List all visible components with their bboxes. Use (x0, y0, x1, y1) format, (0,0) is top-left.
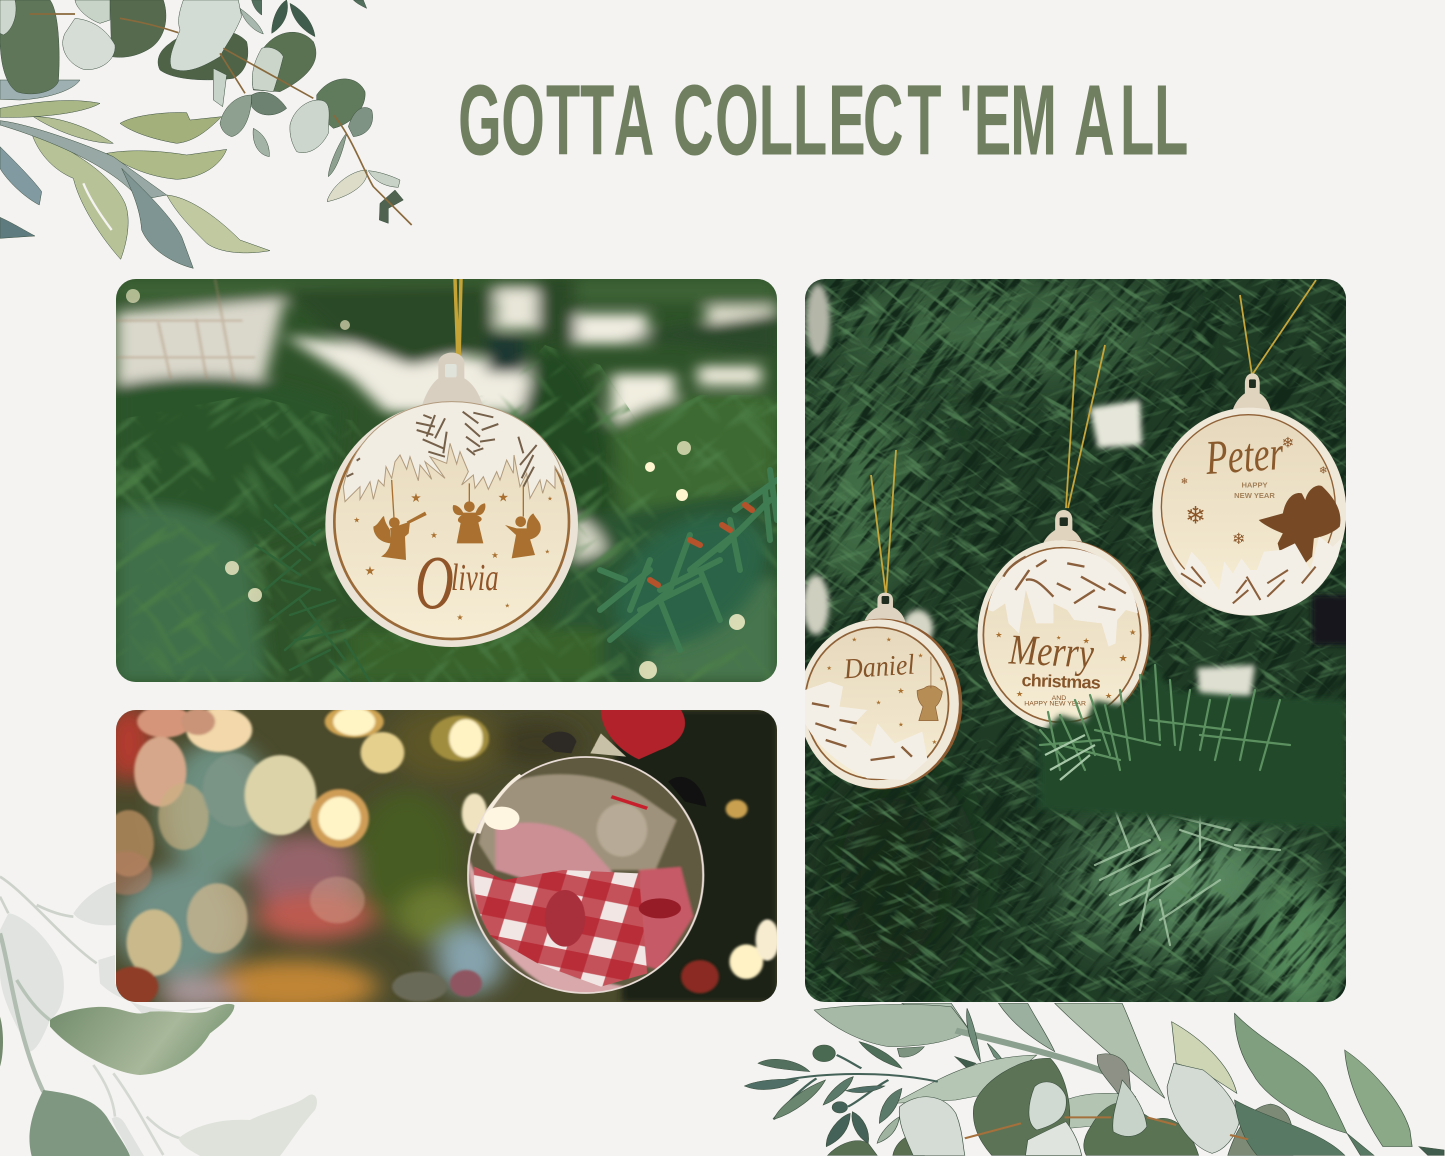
stars: ★ (886, 637, 892, 644)
stars (353, 491, 553, 622)
stars: ★ (939, 676, 945, 683)
stars: ★ (410, 491, 422, 505)
angel silhouette (1259, 485, 1340, 567)
stars: ★ (491, 550, 499, 560)
pale foreground needles, lower right (1095, 800, 1280, 945)
greeting: christmas (1021, 670, 1101, 693)
stars: ★ (1016, 690, 1023, 699)
bokeh lights (101, 706, 779, 1007)
window gaps between branches (803, 284, 1352, 702)
stars: ★ (1082, 636, 1090, 645)
stars: ★ (932, 739, 937, 746)
name: Olivia: livia (451, 558, 499, 599)
photo: three ornaments on tree (799, 279, 1352, 1020)
greeting (1234, 482, 1275, 498)
greeting: Merry (1007, 626, 1096, 677)
snowflakes: ❄ (1181, 476, 1188, 486)
hanging threads (392, 480, 523, 518)
stars: ★ (1129, 628, 1136, 637)
blurred background colours (103, 703, 580, 1013)
sharp foreground needles, left and right (255, 470, 791, 682)
hanger clips (542, 732, 576, 753)
wooden ornament: Daniel (799, 593, 962, 789)
foliage: bottom right (744, 1003, 1444, 1155)
name: Olivia: O (415, 541, 454, 626)
stars: ★ (1105, 691, 1112, 700)
stars: ★ (897, 686, 905, 695)
fairy lights (126, 289, 745, 679)
snowflakes: ❄ (1232, 531, 1245, 548)
needle texture (116, 345, 777, 682)
greeting: NEW YEAR (1234, 491, 1276, 500)
stars: ★ (505, 603, 510, 610)
snowflake cut-outs (805, 682, 927, 780)
palm cut-outs (1170, 537, 1343, 615)
gold strings (871, 280, 1316, 596)
photo background: blurred gaps and foliage (116, 279, 777, 682)
name: Peter: Peter (1203, 426, 1286, 485)
stars (995, 628, 1136, 700)
name: Daniel: Daniel (842, 649, 916, 685)
angels (373, 501, 541, 560)
foreground branch covering Merry ornament (1040, 665, 1346, 830)
greeting: HAPPY NEW YEAR (1024, 700, 1086, 707)
snowflakes: ❄ (1282, 435, 1294, 451)
stars: ★ (364, 564, 376, 578)
red flower (601, 710, 685, 759)
stars: ★ (826, 665, 832, 672)
photo: glass bauble with bokeh (101, 703, 779, 1013)
foliage: top left (0, 0, 412, 268)
palm frond cut-outs (343, 402, 564, 502)
snowflakes: ❄ (1185, 503, 1206, 529)
stars: ★ (547, 496, 553, 503)
needle texture (805, 279, 1346, 1002)
window netting (116, 279, 255, 382)
foliage: bottom left (0, 877, 317, 1156)
photo: Olivia ornament on tree (116, 279, 791, 682)
greeting: HAPPY (1241, 481, 1268, 490)
angel (917, 657, 942, 721)
stars: ★ (918, 652, 923, 659)
snowflake cut-outs (988, 548, 1138, 647)
snowflakes: ❄ (1319, 465, 1328, 476)
stars: ★ (852, 637, 857, 644)
gold string (455, 279, 461, 362)
stars: ★ (430, 530, 438, 540)
title: GOTTA COLLECT 'EM ALL (458, 66, 1188, 177)
stars: ★ (1056, 635, 1061, 641)
stars: ★ (498, 491, 509, 505)
snowflakes (1181, 435, 1328, 548)
glass bauble (468, 757, 704, 1000)
background gaps and foliage masses (805, 280, 1350, 1020)
greeting (1008, 636, 1100, 706)
stars: ★ (353, 515, 360, 524)
dark tree behind bauble (613, 710, 777, 1002)
stars: ★ (545, 548, 550, 555)
stars: ★ (898, 722, 904, 729)
stars: ★ (995, 630, 1003, 639)
stars (826, 637, 945, 746)
greeting: AND (1052, 695, 1066, 702)
wooden ornament: Olivia (325, 353, 578, 647)
stars: ★ (1118, 654, 1128, 665)
stars: ★ (456, 613, 464, 622)
wooden ornament: Merry Christmas (978, 510, 1151, 730)
wooden ornament: Peter (1152, 373, 1346, 616)
stars: ★ (876, 699, 881, 706)
